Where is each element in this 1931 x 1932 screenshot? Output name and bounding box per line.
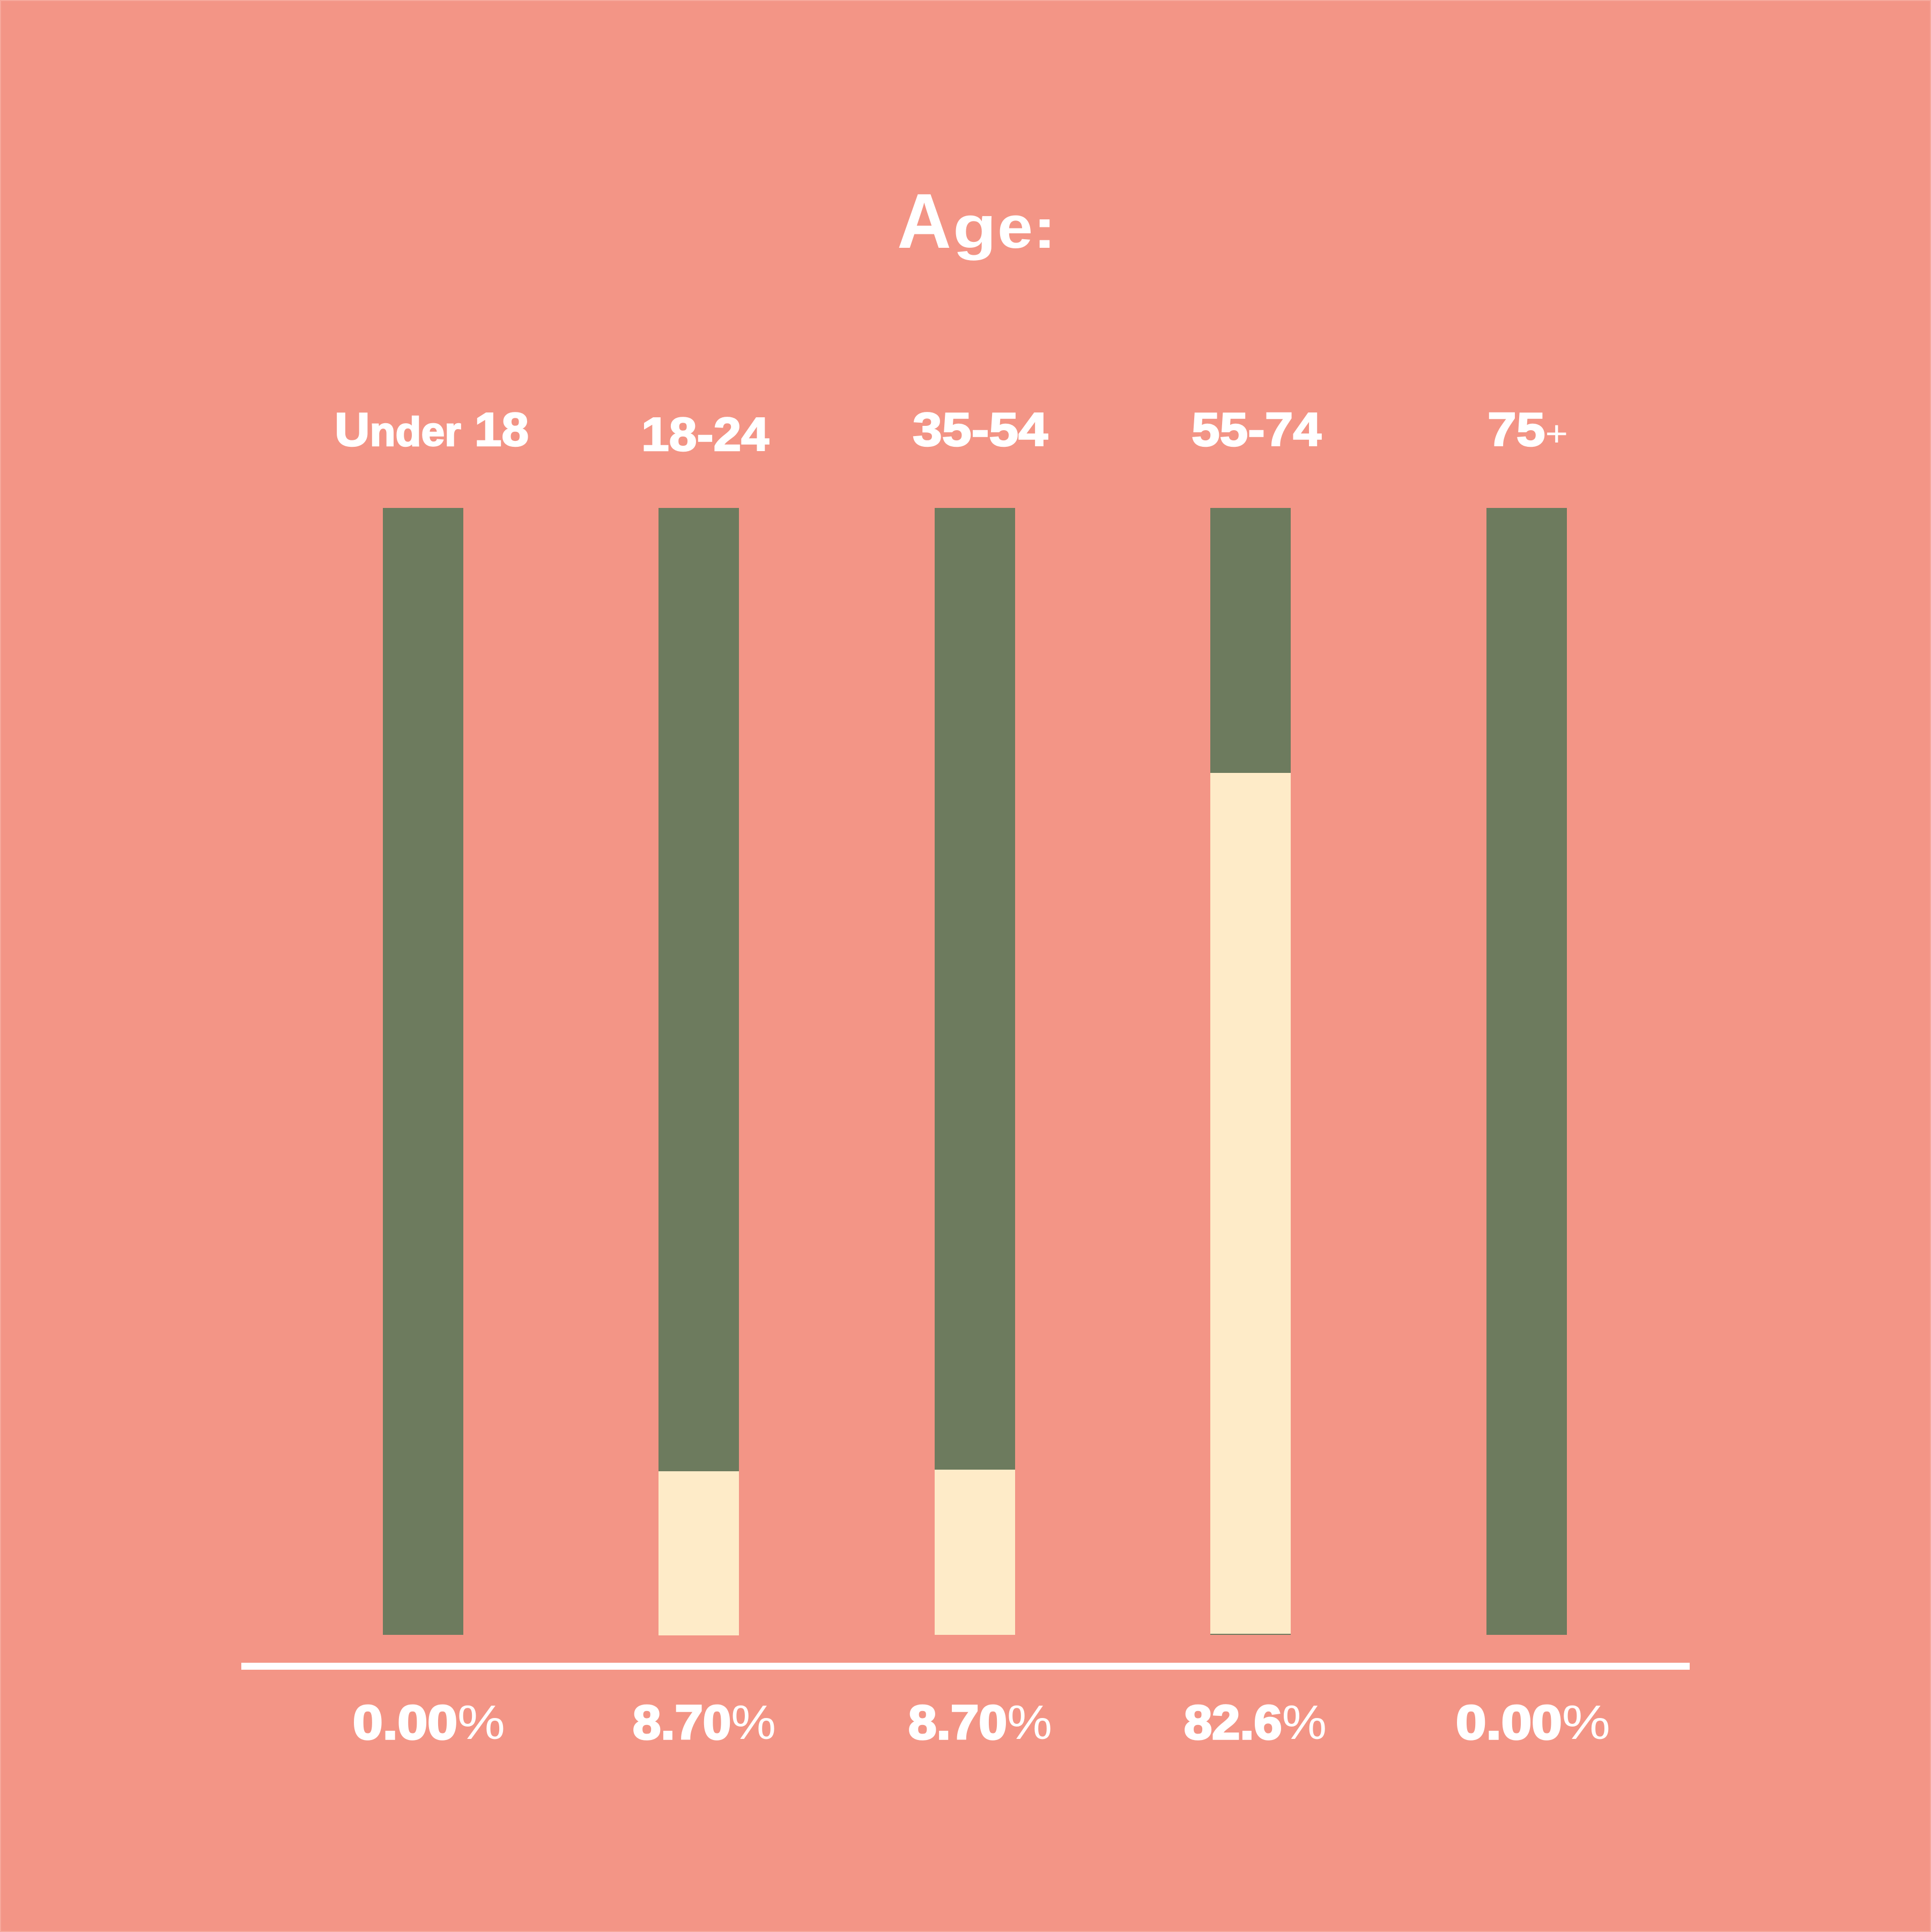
title [897, 178, 1056, 264]
value: 18-24: 8.70% [633, 1696, 776, 1750]
label: Under 18: Under 18 [335, 403, 529, 456]
value: 35-54: 8.70% [908, 1696, 1052, 1750]
value: Under 18: 0.00% [353, 1696, 505, 1750]
title: e [997, 194, 1033, 261]
title: g [953, 194, 996, 261]
title: : [1033, 197, 1056, 260]
value: 75+: 0.00 % [1456, 1696, 1610, 1750]
bar: Under 18 [383, 508, 463, 1635]
label: 18-24: 18-24 [641, 408, 769, 461]
bar: 55-74 [1210, 508, 1291, 1635]
column labels [335, 403, 1568, 461]
bar: 75+ [1486, 508, 1567, 1635]
axis line [241, 1663, 1690, 1670]
label: 55-74: 55-74 [1192, 403, 1321, 456]
bar: 35-54 [935, 508, 1015, 1635]
title: A [897, 178, 951, 264]
bar: 18-24 [659, 508, 739, 1635]
value: 55-74: 82.6% [1184, 1696, 1327, 1750]
label: 35-54: 35-54 [913, 403, 1048, 456]
label: 75+: 75+ [1488, 403, 1568, 456]
bar chart [383, 508, 1567, 1635]
percentage values [353, 1696, 1610, 1750]
